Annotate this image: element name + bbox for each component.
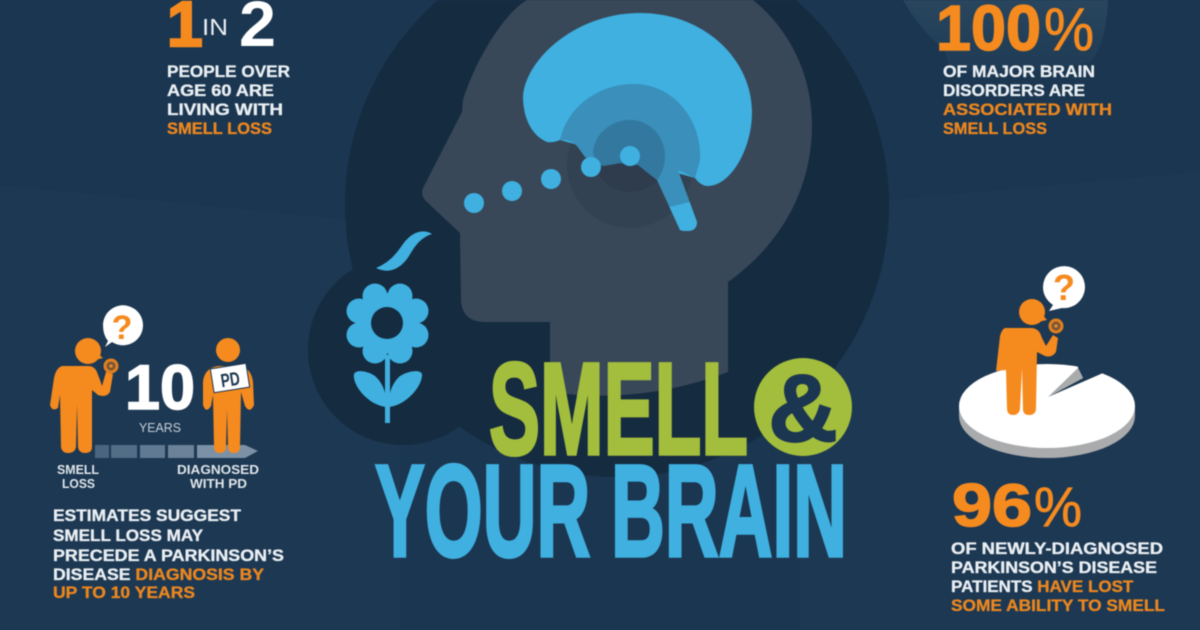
stat text: OF MAJOR BRAIN <box>943 62 1095 81</box>
pd sign: PD <box>219 369 241 392</box>
person: diagnosed <box>203 338 254 453</box>
title line: smell: SMELL <box>489 335 748 482</box>
timeline text: SMELL LOSS MAY <box>53 526 204 545</box>
brain middle arch <box>560 84 700 231</box>
stat text: OF NEWLY-DIAGNOSED <box>951 539 1163 558</box>
stat number: IN <box>202 14 228 40</box>
timeline arrow <box>95 445 258 458</box>
stat number <box>167 0 276 60</box>
head silhouette <box>422 0 812 396</box>
icon: small flower <box>104 358 118 374</box>
ten years: YEARS <box>139 420 181 435</box>
brain inner arch <box>593 120 665 180</box>
ampersand badge: & <box>768 355 838 462</box>
background glow <box>903 0 1108 71</box>
timeline text <box>53 506 284 602</box>
person on pie <box>996 299 1058 415</box>
timeline labels: LOSS <box>62 476 95 491</box>
stat text: SMELL LOSS <box>943 119 1047 138</box>
stat text: LIVING WITH <box>167 100 283 119</box>
speech bubble: ? <box>112 309 132 347</box>
icon: flower <box>346 284 428 423</box>
scent dots <box>464 146 640 213</box>
stat text <box>951 539 1165 615</box>
speech bubble: ? <box>1053 267 1075 308</box>
brain <box>523 13 752 231</box>
stat text: AGE 60 ARE <box>167 81 274 100</box>
stat text: SMELL LOSS <box>167 119 272 138</box>
stat text: SOME ABILITY TO SMELL <box>951 596 1165 615</box>
pd sign <box>210 363 250 394</box>
inner dark rings <box>567 102 693 228</box>
timeline text: PRECEDE A PARKINSON’S <box>53 546 284 565</box>
icon: small flower <box>1048 318 1064 334</box>
pie chart <box>959 350 1135 458</box>
stat text <box>943 62 1112 138</box>
timeline labels <box>57 462 259 491</box>
speech bubble <box>1043 266 1085 311</box>
stat: 1 in 2 <box>167 0 290 138</box>
timeline labels: DIAGNOSED <box>177 462 259 477</box>
stat number <box>936 0 1094 64</box>
stat text: PATIENTS HAVE LOST <box>951 577 1134 596</box>
scent swoosh <box>376 231 432 271</box>
stem tip <box>670 202 697 231</box>
stat number: 96 <box>952 472 1032 539</box>
title <box>375 335 852 584</box>
stat: 96% panel <box>951 266 1165 615</box>
timeline labels: SMELL <box>57 462 99 477</box>
brain outer <box>523 13 752 186</box>
stat text: ASSOCIATED WITH <box>943 100 1112 119</box>
ten years: 10 <box>125 353 195 423</box>
stat text: PARKINSON’S DISEASE <box>951 558 1157 577</box>
timeline text: ESTIMATES SUGGEST <box>53 506 242 525</box>
stat text: PEOPLE OVER <box>167 62 290 81</box>
stat number: % <box>1034 475 1082 538</box>
stat text <box>167 62 290 138</box>
timeline text: UP TO 10 YEARS <box>53 583 195 602</box>
stat: 100% <box>936 0 1112 138</box>
person: smell loss <box>50 338 113 453</box>
title line: your brain: YOUR BRAIN <box>375 437 847 584</box>
stat text: DISORDERS ARE <box>943 81 1085 100</box>
parkinson timeline panel <box>50 305 284 602</box>
timeline labels: WITH PD <box>190 476 247 491</box>
dark halo behind head <box>308 0 889 477</box>
stat number <box>952 472 1082 539</box>
background rays <box>0 172 1200 630</box>
timeline text: DISEASE DIAGNOSIS BY <box>53 565 265 584</box>
speech bubble <box>103 305 143 347</box>
